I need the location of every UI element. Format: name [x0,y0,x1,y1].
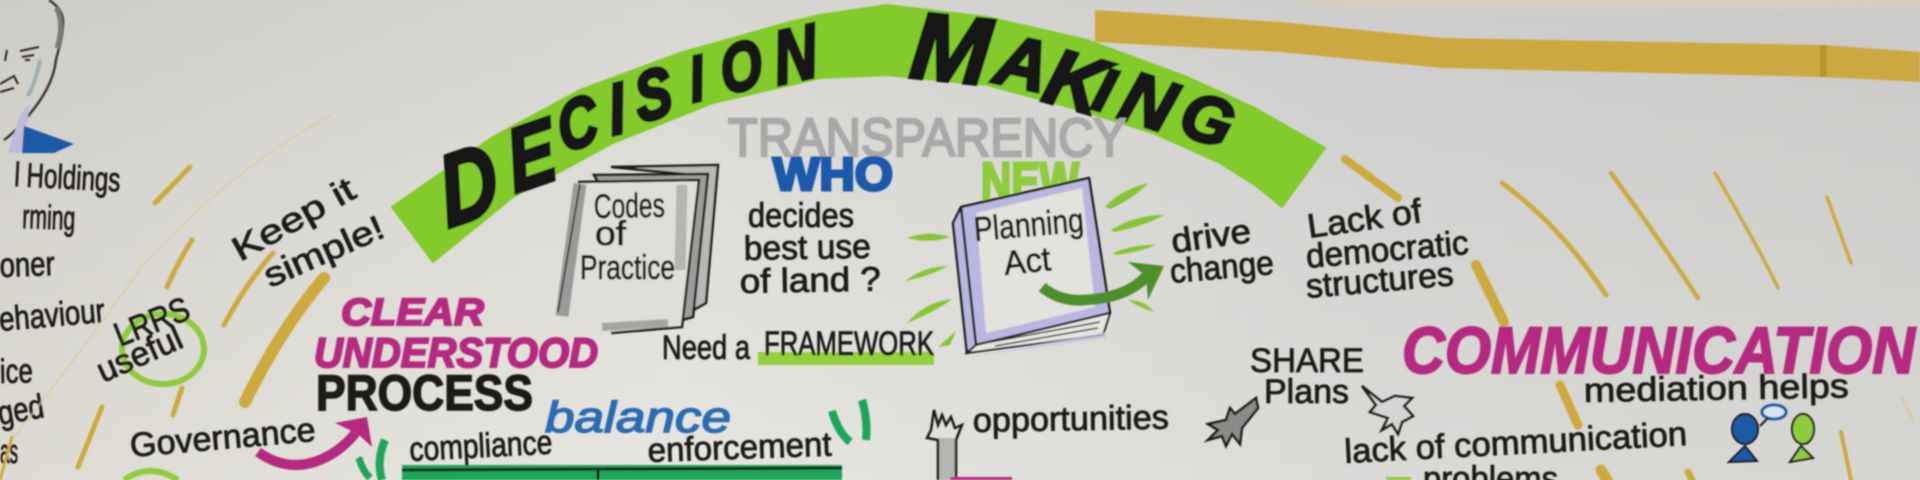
book: planning act: Act [1002,240,1053,283]
title: decision: I [604,67,632,150]
scale: compliance and enforcement [359,400,866,480]
title: decision: I [685,43,709,116]
drive change text: drive [1169,212,1253,261]
title: making: G [1172,76,1243,162]
title: decision: S [629,52,678,138]
title: making: N [1111,56,1187,149]
circled note [91,290,204,390]
cropped list of roles: ehaviour [0,292,106,339]
need a framework: FRAMEWORK [764,325,934,363]
gold radiating strokes [0,115,1913,480]
cropped list of roles: as [0,433,18,471]
green arc banner [392,5,1325,262]
title: decision: O [715,24,767,109]
cropped list of roles [0,156,121,471]
clear understood process heading: PROCESS [316,365,533,421]
title: decision: E [499,99,566,212]
green rays around book [905,183,1164,347]
lack of democratic structures: structures [1304,255,1455,306]
scale: compliance and enforcement: enforcement [647,426,833,470]
cropped list of roles: l Holdings [14,156,121,200]
keep it simple: simple! [258,209,390,295]
title: decision: C [551,79,606,168]
share plans text: Plans [1264,373,1349,411]
lack of communication problems: lack of communication [1343,415,1688,471]
question text: of land ? [739,261,881,301]
bottom edge fragments [124,471,1411,480]
who heading: WHO [773,148,893,200]
question text: decides [748,197,854,235]
keep it simple: Keep it [225,170,363,269]
transparency heading: TRANSPARENCY [728,108,1126,168]
book: codes of practice: of [595,215,627,253]
opportunities text: opportunities [972,399,1169,440]
governance with arrow: Governance [128,411,317,465]
question text: best use [743,228,871,268]
title: decision: N [768,8,824,101]
cropped list of roles: rming [22,198,76,238]
cropped list of roles: oner [0,245,55,285]
title: decision: D [429,121,508,250]
title: making: I [1086,55,1123,127]
drive change text: change [1168,244,1275,291]
clear understood process heading [314,292,598,421]
circled note: useful [91,319,188,390]
share plans text: SHARE [1250,342,1364,380]
portrait sketch [0,0,74,153]
drive change text [1168,212,1275,291]
arrow: drive change [1042,262,1164,300]
gold top banner line [1095,10,1920,82]
clear understood process heading: CLEAR [341,292,485,334]
right hand icon [1362,386,1413,434]
book: codes of practice: Codes [593,187,665,226]
need a framework [662,325,934,367]
raised hand icon [927,410,962,480]
book: planning act [953,178,1110,357]
cropped list of roles: ice [0,352,33,391]
book: codes of practice: Practice [580,249,675,287]
mediation helps: mediation helps [1583,367,1849,410]
need a framework: Need a [662,329,750,367]
lack of democratic structures: Lack of [1305,192,1425,246]
keep it simple [225,170,390,295]
book: planning act: Planning [972,202,1085,249]
share plans text [1250,342,1364,411]
question text [739,197,881,301]
balance heading: balance [545,393,731,442]
lack of democratic structures [1304,192,1470,306]
circled note: LRRS [109,290,195,354]
new label: NEW [981,152,1079,212]
title: making: K [1035,31,1120,134]
title: making: A [987,19,1056,108]
lack of democratic structures: democratic [1304,224,1470,276]
left hand icon [1208,398,1258,446]
book: codes of practice [558,165,718,333]
scale: compliance and enforcement: compliance [408,424,553,469]
clear understood process heading: UNDERSTOOD [314,329,598,376]
people in conversation icon [1729,405,1814,462]
